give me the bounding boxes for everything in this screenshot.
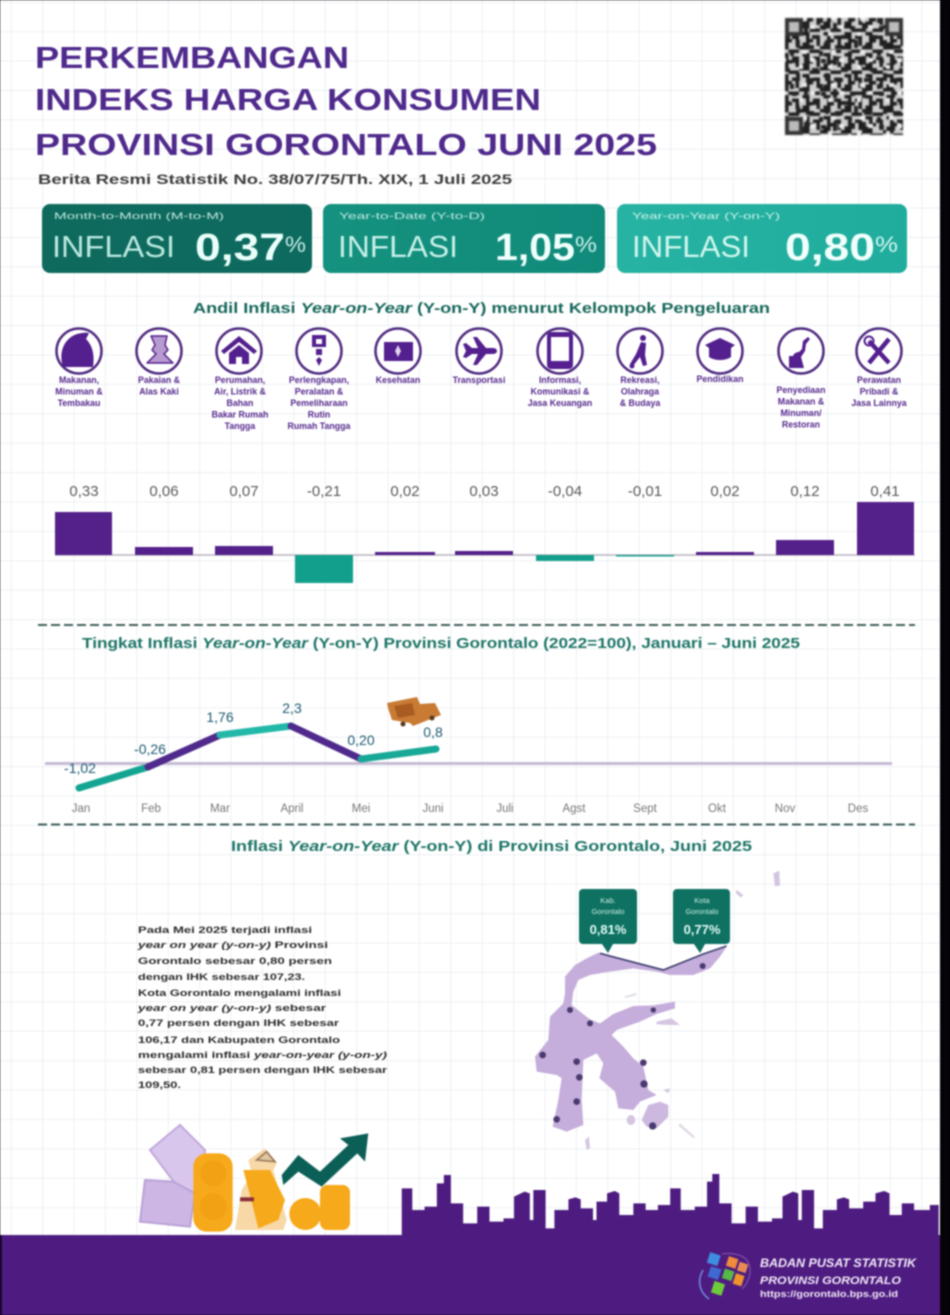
label: information: Informasi, [539,375,581,385]
label: recreation: Olahraga [621,386,659,396]
footer organisation text: https://gorontalo.bps.go.id [760,1289,898,1299]
label: household: Pemeliharaan [290,398,348,408]
stat card: month-to-month: Month-to-Month (M-to-M) [54,211,224,221]
month axis: April [280,803,304,815]
label: food: Tembakau [58,398,100,408]
label: household: Peralatan & [295,386,344,396]
month axis: Feb [141,803,161,815]
icon: recreation [618,328,662,374]
skyline [402,1174,939,1260]
point values: 2,3 [282,700,302,716]
label: personal care: Perawatan [857,375,901,385]
icon: QR code [785,18,903,135]
logo: BPS mark [699,1250,750,1301]
label: information: Komunikasi & [531,386,590,396]
right edge strip [940,0,950,1315]
label: food service: Penyediaan [777,385,825,395]
bar values: 0,02 [710,483,740,500]
stat card: year-to-date: INFLASI [338,229,458,264]
month axis: Mei [352,803,370,815]
bar values: 0,06 [149,483,179,500]
stat card: year-on-year: Year-on-Year (Y-on-Y) [632,211,780,221]
text block: summary: sebesar 0,81 persen dengan IHK sebesar [138,1065,388,1075]
footer organisation text [760,1256,917,1299]
stat card: year-on-year: INFLASI [632,229,750,264]
heading: contribution by expenditure group: Andil Inflasi Year-on-Year (Y-on-Y) menurut Kelompok Pengeluaran [193,300,770,317]
text block: summary: Kota Gorontalo mengalami inflasi [138,988,341,998]
label: clothing: Pakaian & [138,375,181,385]
label: health: Kesehatan [376,375,420,385]
stat card: year-on-year [617,204,907,273]
stat card: month-to-month: % [285,232,306,257]
icon: education [698,328,742,374]
bar values: -0,04 [548,483,582,500]
text block: summary: Gorontalo sebesar 0,80 persen [138,956,332,966]
map: Sulawesi [535,871,780,1150]
month axis: Des [848,803,868,815]
footer band [0,1174,940,1315]
point values [64,700,443,776]
stat card: year-to-date: % [575,232,597,257]
bar values: 0,41 [870,483,900,500]
icon: household equipment [296,328,342,374]
stat card: month-to-month: 0,37 [195,227,285,269]
point values: -1,02 [64,760,96,776]
label: food service: Restoran [782,420,820,430]
text block: summary: Pada Mei 2025 terjadi inflasi [138,925,312,935]
line segments [79,726,436,788]
month axis: Jan [72,803,90,815]
text block: summary: 106,17 dan Kabupaten Gorontalo [138,1035,341,1045]
stat card: year-on-year: % [875,232,898,257]
text block: summary: year on year (y-on-y) sebesar [136,1003,327,1013]
label: recreation: & Budaya [620,398,660,408]
panel: expenditure group icons [56,328,902,374]
icon: personal care [856,328,902,374]
text block: summary: dengan IHK sebesar 107,23. [138,972,305,982]
icon: phone [538,328,582,374]
callout: Kota Gorontalo: Gorontalo [686,907,718,916]
banknotes [150,1125,205,1197]
stat card: year-on-year: 0,80 [785,227,875,269]
callout: Kota Gorontalo: 0,77% [684,922,721,937]
icon: clothing [136,328,182,374]
label: recreation: Rekreasi, [620,375,660,385]
subtitle: Berita Resmi Statistik No. 38/07/75/Th. XIX, 1 Juli 2025 [38,171,512,187]
callout: Kota Gorontalo [673,889,730,953]
point values: -0,26 [134,741,166,757]
callout: Kota Gorontalo: Kota [694,896,711,905]
label: food: Makanan, [59,375,99,385]
label: household: Rumah Tangga [288,421,351,431]
text block: summary: 109,50. [138,1080,181,1090]
callout: Kabupaten Gorontalo: 0,81% [590,922,627,937]
heading: map section: Inflasi Year-on-Year (Y-on-Y) di Provinsi Gorontalo, Juni 2025 [231,838,752,855]
label: food service: Minuman/ [780,408,822,418]
label: housing: Perumahan, [215,375,265,385]
label: information: Jasa Keuangan [528,398,592,408]
title: PROVINSI GORONTALO JUNI 2025 [35,127,657,162]
stat card: month-to-month [42,204,312,273]
label: personal care: Pribadi & [860,386,899,396]
title: INDEKS HARGA KONSUMEN [35,82,541,117]
coin stacks [193,1153,350,1232]
icon: delivery truck [387,697,441,726]
icon: money and coins illustration [140,1125,368,1232]
bar values: 0,33 [69,483,99,500]
label: clothing: Alas Kaki [139,386,179,396]
text block: summary [136,925,388,1090]
label: food: Minuman & [55,386,103,396]
point values: 0,20 [347,732,375,748]
month axis: Sept [633,803,658,815]
icon: house [216,328,262,374]
map markers [539,963,706,1130]
label: food service: Makanan & [778,396,825,406]
callout: Kabupaten Gorontalo: Kab. [600,896,616,905]
line chart: monthly y-on-y inflation [45,700,892,815]
label: household: Perlengkapan, [289,375,349,385]
icon: transport [456,328,502,374]
bar values: 0,02 [390,483,420,500]
divider [38,824,915,826]
callout: Kabupaten Gorontalo [579,889,637,953]
bar values: 0,12 [790,483,820,500]
footer organisation text: PROVINSI GORONTALO [760,1275,901,1287]
callout: Kabupaten Gorontalo: Gorontalo [592,907,624,916]
label: housing: Air, Listrik & [214,386,267,396]
title [35,40,657,162]
bar chart: contribution to inflation [55,483,915,583]
label: housing: Bahan [227,398,253,408]
heading: inflation trend: Tingkat Inflasi Year-on-Year (Y-on-Y) Provinsi Gorontalo (2022=100), Januari – Juni 2025 [82,635,800,652]
growth arrow [282,1133,368,1187]
bar values: -0,01 [628,483,662,500]
bar values: 0,07 [229,483,259,500]
panel: expenditure group labels [55,374,907,431]
icon: food [56,328,102,374]
divider [38,624,915,626]
month axis: Juni [422,803,444,815]
money bag [235,1148,287,1230]
label: education: Pendidikan [697,374,743,384]
footer organisation text: BADAN PUSAT STATISTIK [760,1256,917,1270]
text block: summary: year on year (y-on-y) Provinsi [136,940,328,950]
month axis: Juli [496,803,514,815]
month axis [72,803,868,815]
month axis: Okt [708,803,727,815]
label: housing: Tangga [225,421,255,431]
text block: summary: mengalami inflasi year-on-year (y-on-y) [138,1050,387,1060]
stat card: year-to-date: Year-to-Date (Y-to-D) [339,211,485,221]
label: transport: Transportasi [453,375,505,385]
stat card: month-to-month: INFLASI [52,229,175,264]
bar values [69,483,900,500]
bar values: 0,03 [469,483,499,500]
positive bars [55,502,914,555]
negative bars [295,555,674,583]
point values: 1,76 [206,709,234,725]
text block: summary: 0,77 persen dengan IHK sebesar [138,1018,340,1028]
stat card: year-to-date [323,204,605,273]
point values: 0,8 [423,724,443,740]
month axis: Agst [562,803,586,815]
icon: food service [778,328,824,374]
label: personal care: Jasa Lainnya [851,398,907,408]
title: PERKEMBANGAN [35,40,349,75]
label: housing: Bakar Rumah [212,410,268,420]
month axis: Mar [210,803,230,815]
icon: health [376,328,420,374]
month axis: Nov [775,803,795,815]
label: household: Rutin [308,410,330,420]
bar values: -0,21 [307,483,341,500]
stat card: year-to-date: 1,05 [495,227,575,269]
